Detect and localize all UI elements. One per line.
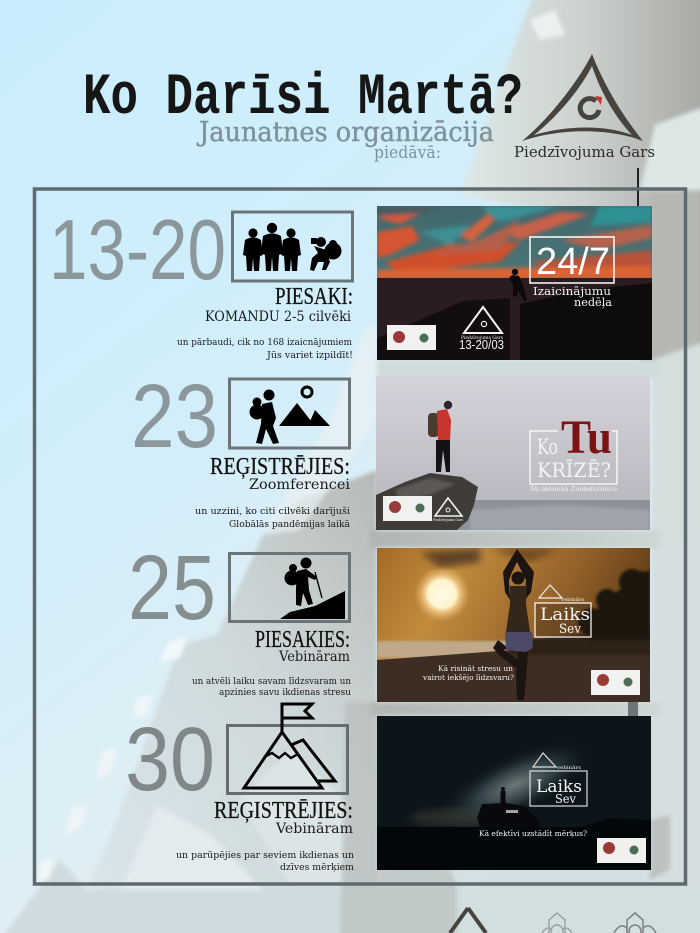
description (195, 506, 350, 530)
heading REĢISTRĒJIES: REĢISTRĒJIES: (214, 798, 353, 824)
description: Jūs variet izpildīt! (266, 350, 353, 361)
heading PIESAKIES: PIESAKIES: (255, 627, 350, 653)
logo: Piedzīvojuma Gars (514, 54, 655, 161)
description (176, 850, 354, 873)
event 13-20 (49, 203, 353, 361)
subtitle: piedāvā: (374, 143, 441, 163)
sponsor logos (591, 670, 640, 695)
description (177, 337, 353, 361)
heading Ko Tu Krīzē: Šķ-mēneša Zoomference (530, 484, 617, 493)
bottom emblem right (614, 913, 656, 933)
photo logo and dates (459, 307, 504, 352)
sponsor logos (597, 838, 646, 863)
sea and sand (377, 641, 512, 658)
sunset clouds (377, 206, 652, 279)
photo panel: Laiks Sev night sky (377, 716, 651, 870)
sponsor logos (387, 325, 436, 350)
heading Ko Tu Krīzē: Ko (537, 435, 558, 459)
heading PIESAKI: PIESAKI: (275, 284, 353, 310)
photo panel: 24/7 challenge week: 24/7 (536, 241, 610, 283)
heading REĢISTRĒJIES: REĢISTRĒJIES: (210, 454, 350, 480)
heading Ko Tu Krīzē: KRĪZĒ? (537, 458, 611, 482)
photo panel: Ko Tu Krīzē? (376, 376, 650, 530)
caption Izaicinājumu nedēļa: Izaicinājumu (533, 285, 611, 298)
icon box: mountain with flag (228, 704, 348, 794)
heading Laiks Sev: Sev (559, 622, 582, 637)
date 25: 25 (128, 537, 216, 639)
subheading: Zoomferencei (249, 477, 351, 493)
jumping figure (509, 269, 527, 301)
description: un uzzini, ko citi cilvēki darījuši (195, 506, 350, 517)
date 13-20: 13-20 (49, 203, 226, 298)
heading Laiks Sev: Laiks (536, 777, 582, 797)
photo logo (433, 498, 463, 522)
description: Globālās pandēmijas laikā (229, 519, 350, 530)
description: un atvēli laiku savam līdzsvaram un (192, 676, 351, 687)
photo logo (533, 753, 581, 771)
bottom logo fragment (450, 908, 486, 933)
logo: Piedzīvojuma Gars: Piedzīvojuma Gars (514, 143, 655, 161)
description: dzīves mērķiem (280, 862, 354, 873)
description: un pārbaudi, cik no 168 izaicnājumiem (177, 337, 352, 348)
bottom emblem left (542, 913, 572, 933)
icon box: hiker and mountains (230, 379, 350, 448)
rock (376, 473, 478, 530)
man with red jacket (428, 401, 452, 472)
heading Laiks Sev (530, 771, 587, 806)
photo logo (539, 585, 584, 603)
outer frame (34, 189, 686, 884)
sponsor logos (383, 496, 432, 521)
palm trees (578, 569, 650, 640)
date 30: 30 (125, 710, 215, 810)
date 23: 23 (131, 367, 218, 467)
heading Laiks Sev: Laiks (540, 605, 590, 625)
photo panel: 24/7 challenge week (377, 206, 652, 360)
yoga silhouette (493, 549, 534, 700)
photo logo: Piedzīvojuma Gars (433, 518, 463, 522)
description (192, 676, 351, 698)
question: Kā efektīvi uzstādīt mērķus? (479, 829, 587, 838)
event 23 (131, 367, 351, 530)
event 25 (128, 537, 351, 698)
photo panel: Laiks Sev yoga at sunset (377, 548, 650, 702)
photo logo and dates: Piedzīvojuma Gars (461, 335, 504, 341)
caption Izaicinājumu nedēļa: nedēļa (574, 296, 612, 309)
event 30 (125, 704, 354, 873)
heading Ko Tu Krīzē (529, 422, 618, 492)
subheading: Vebināram (278, 649, 350, 665)
label box 24/7 (530, 237, 614, 283)
description: un parūpējies par seviem ikdienas un (176, 850, 354, 861)
subtitle: Jaunatnes organizācija (196, 117, 494, 148)
photo logo: vebinārs (560, 597, 584, 603)
subheading: KOMANDU 2-5 cilvēki (205, 309, 351, 325)
icon box: climber (230, 554, 350, 622)
title: Ko Darīsi Martā? (83, 66, 523, 131)
jeep and person silhouette (477, 787, 539, 827)
heading Laiks Sev: Sev (555, 792, 576, 806)
subheading: Vebināram (275, 821, 353, 837)
photo logo: vebinārs (556, 765, 581, 771)
heading Ko Tu Krīzē: Tu (561, 411, 612, 464)
question: vairot iekšējo līdzsvaru? (422, 673, 514, 682)
subtitle (196, 117, 494, 163)
caption Izaicinājumu nedēļa (533, 285, 612, 309)
photo logo and dates: 13-20/03 (459, 337, 504, 352)
icon box: team and photographer (232, 212, 352, 281)
heading Laiks Sev (535, 603, 591, 637)
question: Kā risināt stresu un (438, 664, 513, 673)
description: apzinies savu ikdienas stresu (219, 687, 351, 698)
question (422, 666, 514, 682)
